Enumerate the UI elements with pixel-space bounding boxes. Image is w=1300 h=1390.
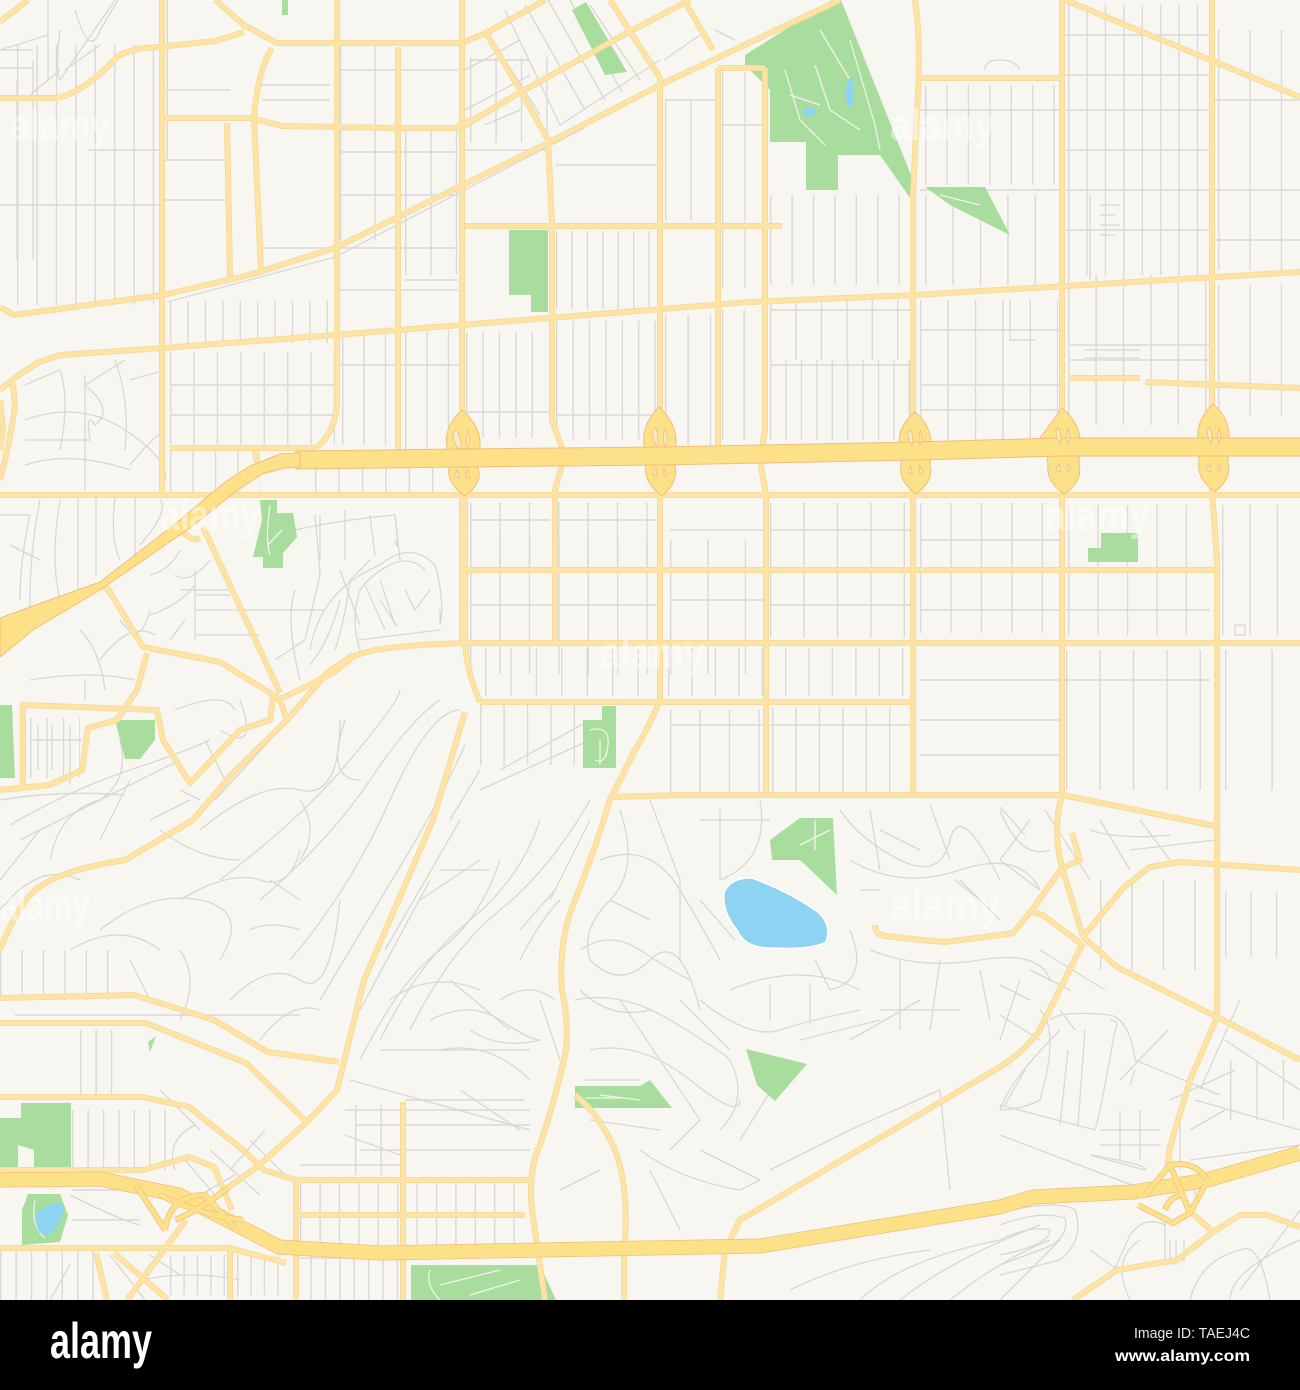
park: left hill bbox=[115, 720, 155, 759]
footer website: www.alamy.com bbox=[1114, 1348, 1250, 1365]
freeway interchanges bbox=[446, 404, 1229, 496]
park paths bbox=[34, 30, 980, 1300]
footer image id: Image ID: TAEJ4C bbox=[1134, 1325, 1250, 1342]
park: freeway south bbox=[411, 1265, 556, 1300]
park: south wedge bbox=[746, 1049, 807, 1101]
park: north east triangle bbox=[925, 187, 1010, 235]
stock watermark: alamy bbox=[600, 629, 705, 678]
small west lake bbox=[36, 1203, 64, 1236]
park: playground bbox=[583, 706, 616, 768]
golf course ponds bbox=[803, 78, 854, 117]
stock watermark: alamy bbox=[10, 101, 110, 150]
footer bar bbox=[0, 1300, 1300, 1390]
freeway west segment bbox=[0, 453, 300, 657]
freeways bbox=[0, 447, 1300, 1253]
park: lower left lake ground bbox=[22, 1194, 68, 1245]
park: left edge bbox=[0, 705, 15, 778]
park: golf course bbox=[745, 0, 915, 205]
lake bbox=[724, 878, 828, 948]
west freeway interchange bbox=[136, 1185, 243, 1230]
footer logo: alamy: alamy bbox=[50, 1313, 152, 1369]
stock watermark: alamy bbox=[890, 881, 1000, 930]
park: lower left block bbox=[0, 1103, 71, 1170]
south freeway bbox=[0, 1153, 1300, 1253]
stock watermark: alamy bbox=[160, 491, 260, 540]
park: strip bbox=[575, 1080, 672, 1108]
stock watermark: alamy bbox=[0, 881, 90, 930]
stock watermark: alamy bbox=[890, 101, 995, 150]
park: east block bbox=[1088, 533, 1138, 562]
park: west hill bbox=[253, 500, 297, 568]
park: tiny sliver bbox=[148, 1036, 156, 1052]
stock watermark: alamy bbox=[1045, 491, 1150, 540]
stock watermark bbox=[0, 101, 1150, 930]
east-west freeway bbox=[295, 447, 1300, 460]
east freeway interchange bbox=[1138, 1164, 1207, 1223]
park: central rectangle bbox=[509, 230, 548, 312]
interchange islands bbox=[453, 428, 1222, 478]
park: north of lake bbox=[770, 818, 837, 895]
park: small top bbox=[282, 0, 288, 15]
park: top strip bbox=[572, 2, 627, 75]
